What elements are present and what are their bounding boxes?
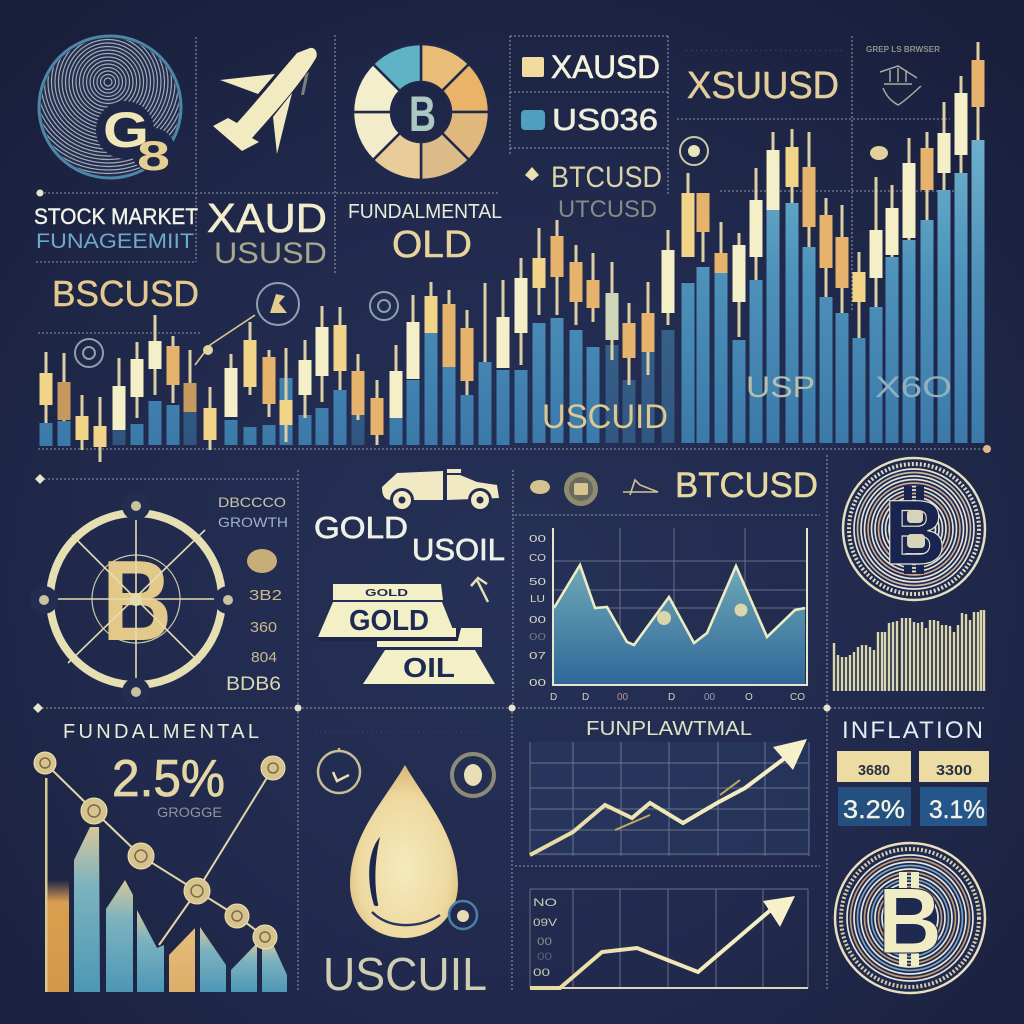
compass legend: 360 bbox=[250, 619, 277, 636]
heading: stock market: FUNAGEEMIIT bbox=[36, 230, 194, 253]
line chart with arrow: lower bbox=[530, 889, 808, 988]
area chart axis labels bbox=[529, 534, 805, 703]
icon: shield bbox=[866, 45, 940, 105]
legend: tickers bbox=[521, 49, 662, 223]
label: XSUUSD: XSUUSD bbox=[687, 65, 839, 107]
inflation table: 3.1% bbox=[929, 796, 985, 824]
label: XSUUSD: ................................ bbox=[686, 47, 841, 53]
label: gold usoil bbox=[314, 510, 505, 567]
candle bodies: tan bbox=[64, 382, 190, 420]
icon: small round badges bbox=[75, 137, 888, 367]
area chart axis labels: D bbox=[550, 692, 557, 703]
compass legend bbox=[218, 494, 288, 695]
labels over chart: USP bbox=[746, 371, 815, 404]
area chart axis labels: 00 bbox=[529, 678, 547, 689]
area chart axis labels: LU bbox=[530, 594, 545, 605]
header: BTCUSD: BTCUSD bbox=[675, 466, 818, 505]
label: XAUD USUSD: USUSD bbox=[214, 237, 327, 270]
area chart axis labels: 07 bbox=[529, 651, 547, 662]
area chart axis labels: CO bbox=[529, 553, 546, 564]
icon: truck bbox=[382, 469, 499, 512]
area chart axis labels: 00 bbox=[529, 534, 547, 545]
icon: gold and oil bars: GOLD bbox=[365, 588, 408, 599]
compass legend: DBCCCO bbox=[218, 494, 286, 510]
label: fundamental old: FUNDALMENTAL bbox=[348, 201, 502, 223]
compass legend: 804 bbox=[251, 649, 277, 666]
area chart axis labels: D bbox=[668, 692, 675, 703]
icon: oil drop bbox=[350, 765, 458, 938]
area chart axis labels: 00 bbox=[529, 615, 547, 626]
icons: oil badges bbox=[318, 748, 494, 929]
donut chart with B: B bbox=[409, 86, 436, 142]
icon: trend connector with magnifier bbox=[195, 283, 299, 365]
compass legend: BDB6 bbox=[226, 674, 281, 695]
area chart axis labels: 50 bbox=[529, 577, 547, 588]
labels over chart: X6O bbox=[875, 371, 952, 404]
candle bodies: gold bbox=[46, 147, 859, 447]
icon: gold and oil bars bbox=[318, 584, 495, 684]
area chart bbox=[553, 528, 807, 685]
heading: stock market: STOCK MARKET bbox=[34, 204, 198, 229]
line nodes bbox=[33, 190, 991, 713]
icon: bitcoin coin dark bbox=[843, 458, 985, 600]
label: XSUUSD bbox=[686, 47, 841, 107]
area chart axis labels: 00 bbox=[704, 692, 716, 703]
label: gold usoil: USOIL bbox=[412, 532, 505, 567]
heading: fundamental: FUNDALMENTAL bbox=[63, 721, 259, 743]
line chart with arrow: lower: 09V bbox=[533, 917, 558, 929]
combo chart: bars and nodes bbox=[34, 752, 287, 992]
icon: compass wheel: B bbox=[102, 538, 172, 665]
label: XAUD USUSD: XAUD bbox=[207, 195, 327, 241]
labels over chart: USCUID bbox=[542, 398, 668, 436]
heading: stock market bbox=[34, 204, 198, 253]
label: BSCUSD: BSCUSD bbox=[52, 273, 199, 314]
compass legend: GROWTH bbox=[218, 514, 288, 530]
label: XAUD USUSD bbox=[207, 195, 327, 270]
icon: bitcoin coin light: B bbox=[878, 868, 942, 973]
bar cluster bbox=[834, 610, 984, 691]
legend: tickers: BTCUSD bbox=[551, 161, 662, 194]
area chart axis labels: D bbox=[582, 692, 589, 703]
area chart axis labels: 00 bbox=[529, 632, 547, 643]
icon: fingerprint globe with G6: 8 bbox=[137, 132, 170, 179]
stat: 2.5%: 2.5% bbox=[112, 750, 225, 808]
label: USCUIL: USCUIL bbox=[323, 948, 487, 1000]
area chart axis labels: CO bbox=[790, 692, 805, 703]
area chart axis labels: O bbox=[745, 692, 753, 703]
icon: small arrow bbox=[471, 578, 488, 602]
donut chart with B bbox=[353, 44, 489, 180]
inflation table bbox=[837, 751, 989, 826]
candle wicks bbox=[46, 42, 978, 462]
icon: airplane bbox=[213, 48, 317, 154]
dim volume bars bbox=[119, 330, 668, 445]
legend: tickers: US036 bbox=[552, 102, 658, 137]
candle bodies: orange bbox=[173, 60, 978, 435]
label: fundamental old bbox=[348, 201, 502, 266]
icon: fingerprint globe with G6: G bbox=[103, 102, 149, 158]
legend: tickers: XAUSD bbox=[551, 49, 660, 85]
area chart axis labels: 00 bbox=[617, 692, 629, 703]
icon: gold and oil bars: OIL bbox=[403, 652, 455, 683]
candle bodies: cream bbox=[119, 93, 961, 430]
inflation table: 3300 bbox=[936, 762, 972, 779]
line chart with arrow: lower: 00 bbox=[537, 951, 552, 963]
line chart with arrow: lower: NO bbox=[533, 897, 558, 909]
label: fundamental old: OLD bbox=[392, 224, 472, 266]
candle bodies: pale bbox=[606, 293, 618, 340]
icon: gold and oil bars: GOLD bbox=[349, 605, 429, 637]
stat: 2.5%: GROGGE bbox=[157, 804, 222, 820]
heading: funplawtnal: FUNPLAWTMAL bbox=[586, 718, 752, 740]
line chart with arrow: lower: 00 bbox=[533, 967, 550, 979]
faint caption above drop: ...................................... bbox=[315, 729, 490, 735]
inflation table: 3.2% bbox=[843, 796, 905, 824]
candlestick chart bbox=[46, 42, 978, 462]
inflation table: 3680 bbox=[858, 762, 890, 779]
label: gold usoil: GOLD bbox=[314, 510, 408, 545]
compass legend: 3B2 bbox=[249, 587, 282, 604]
volume bars bbox=[46, 140, 978, 446]
icon: bitcoin coin dark: B bbox=[884, 482, 946, 584]
icon: compass wheel bbox=[30, 492, 242, 706]
line chart with arrow: lower: 00 bbox=[537, 936, 552, 948]
heading: inflation: INFLATION bbox=[842, 717, 983, 744]
legend: tickers: UTCUSD bbox=[558, 196, 657, 223]
labels over chart bbox=[542, 371, 952, 436]
icon: fingerprint globe with G6 bbox=[38, 34, 182, 180]
header: BTCUSD bbox=[530, 466, 818, 506]
line chart with arrow: upper bbox=[530, 739, 809, 856]
icon: shield: GREP LS BRWSER bbox=[866, 45, 940, 54]
icon: bitcoin coin light bbox=[835, 843, 985, 993]
